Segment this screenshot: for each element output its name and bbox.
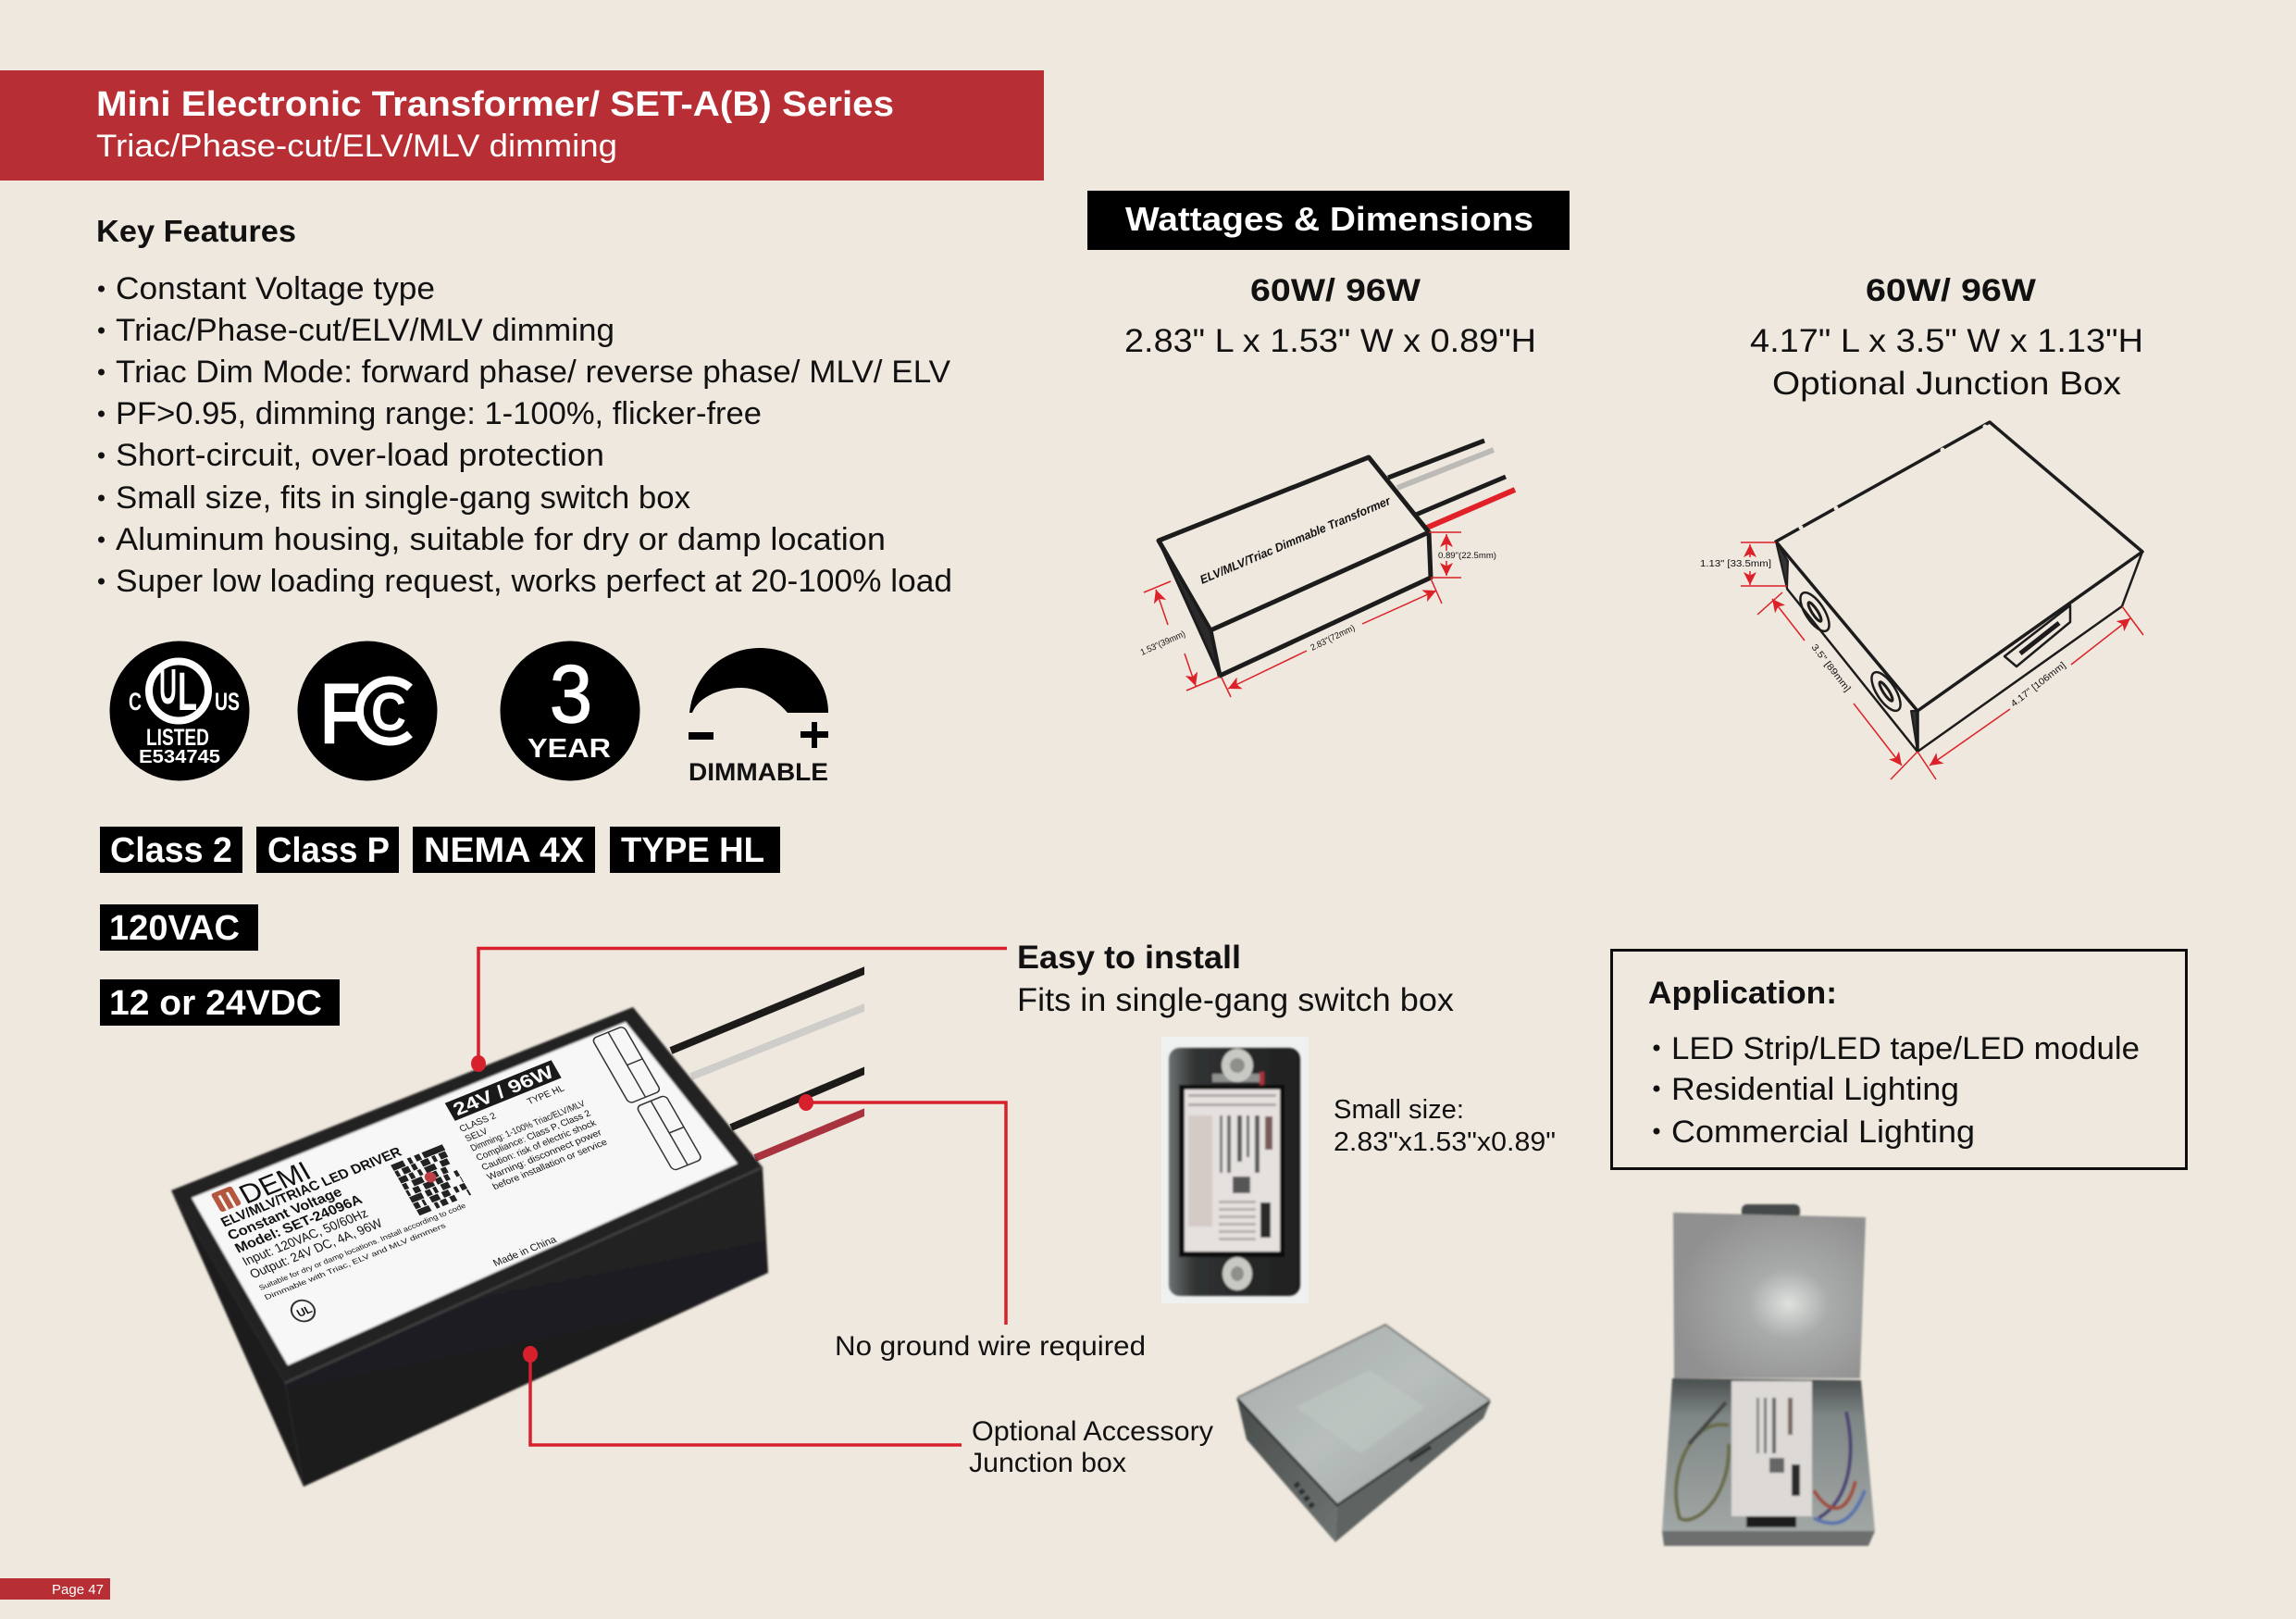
key features list: Constant Voltage type: [116, 271, 435, 306]
specification text: CLASS 2: [458, 1111, 499, 1135]
spec: small unit: [1124, 273, 1536, 359]
application list: Commercial Lighting: [1671, 1115, 1975, 1150]
key features list: Short-circuit, over-load protection: [116, 438, 604, 473]
callout: easy to install leader: [471, 948, 1007, 1072]
product photo: transformer: [171, 965, 879, 1487]
photo: switch box fit: [1161, 1037, 1309, 1303]
page number tab: Page 47: [52, 1582, 104, 1598]
tag: TYPE HL: TYPE HL: [621, 831, 764, 870]
product label: Dimmable with Triac, ELV and MLV dimmers: [263, 1222, 447, 1301]
application list: [1653, 1031, 2140, 1150]
icon: UL listed: E534745: [139, 747, 220, 767]
dimension labels: 1.13" [33.5mm]: [1700, 559, 1771, 569]
box outline: [1776, 422, 2142, 752]
diagram: transformer dimensions: [1139, 441, 1515, 697]
icon: UL listed: C: [129, 688, 142, 716]
photo: open junction box: [1662, 1204, 1875, 1546]
icon: 3 year warranty: YEAR: [527, 734, 611, 764]
icon: 3 year warranty: 3: [550, 648, 592, 740]
spec: small unit: 60W/ 96W: [1250, 273, 1421, 308]
diagram: junction box dimensions: 4.17" [106mm]: [2009, 660, 2068, 709]
specification text: SELV: [464, 1127, 490, 1144]
icon: FCC: [298, 641, 437, 781]
key features list: [98, 271, 952, 599]
product label: Suitable for dry or damp locations. Install according to code: [257, 1202, 468, 1292]
title: Mini Electronic Transformer/ SET-A(B) Series: [96, 85, 894, 124]
header banner: [0, 70, 1044, 181]
dimension lines: [1741, 542, 2143, 779]
tag: 120VAC: [100, 904, 258, 951]
callout text: easy to install: Fits in single-gang switch box: [1017, 982, 1455, 1018]
tag: NEMA 4X: NEMA 4X: [424, 831, 585, 870]
icon: dimmable: [689, 648, 828, 786]
housing label: ELV/MLV/Triac Dimmable Transformer: [1198, 493, 1393, 587]
spec: junction box: 4.17" L x 3.5" W x 1.13"H: [1750, 323, 2143, 359]
key features list: Aluminum housing, suitable for dry or damp location: [116, 522, 886, 557]
lead wires: [671, 965, 879, 1158]
product label: UL: [294, 1302, 315, 1320]
icon: 3 year warranty: [500, 641, 640, 781]
key features list: Super low loading request, works perfect at 20-100% load: [116, 564, 952, 599]
product label: Model: SET-24096A: [232, 1192, 366, 1256]
spec: small unit: 2.83" L x 1.53" W x 0.89"H: [1124, 323, 1536, 359]
spec: junction box: Optional Junction Box: [1772, 366, 2122, 402]
icon: UL listed: US: [215, 688, 240, 716]
callout: no ground wire leader: [799, 1094, 1006, 1325]
callout text: easy to install: [1017, 940, 1455, 1018]
icon: FCC: C: [371, 682, 406, 742]
icon: UL listed: LISTED: [146, 725, 209, 751]
QR code: [392, 1147, 469, 1213]
spec text: small size: 2.83"x1.53"x0.89": [1334, 1127, 1556, 1157]
key features list: Small size, fits in single-gang switch box: [116, 480, 690, 516]
tag: 120VAC: 120VAC: [109, 909, 240, 948]
callout text: no ground wire: No ground wire required: [835, 1331, 1146, 1362]
made in china: Made in China: [491, 1234, 559, 1269]
dimension lines: [1144, 532, 1461, 697]
spec text: small size: [1334, 1095, 1556, 1157]
diagram: junction box dimensions: 3.5" [89mm]: [1809, 642, 1853, 694]
subtitle: Triac/Phase-cut/ELV/MLV dimming: [96, 129, 617, 164]
callout text: optional accessory: Junction box: [969, 1448, 1126, 1478]
tag: 12 or 24VDC: 12 or 24VDC: [109, 984, 322, 1023]
diagram: transformer dimensions: 1.53"(39mm): [1139, 629, 1187, 658]
spec text: small size: Small size:: [1334, 1095, 1464, 1125]
application list: LED Strip/LED tape/LED module: [1671, 1031, 2140, 1066]
icon: UL listed: U: [159, 659, 177, 715]
product label: DEMI: [234, 1156, 316, 1210]
housing: [171, 1007, 768, 1487]
heading: key features: Key Features: [96, 214, 296, 248]
UL mark: [287, 1297, 319, 1325]
callout: junction box leader: [523, 1346, 962, 1445]
specification text: Compliance: Class P, Class 2: [475, 1109, 593, 1164]
page number tab: [0, 1578, 110, 1600]
housing outline: [1159, 457, 1431, 676]
key features list: Triac Dim Mode: forward phase/ reverse phase/ MLV/ ELV: [116, 355, 950, 390]
dimension labels: 0.89"(22.5mm): [1438, 551, 1496, 561]
heading: wattages and dimensions: [1087, 191, 1570, 250]
application heading: Application:: [1648, 976, 1837, 1011]
callout text: optional accessory: Optional Accessory: [972, 1416, 1213, 1447]
heading: wattages and dimensions: Wattages & Dimensions: [1125, 200, 1533, 238]
key features list: PF>0.95, dimming range: 1-100%, flicker-free: [116, 396, 762, 431]
wattage badge: [445, 1060, 562, 1121]
specification text: Warning: disconnect power: [486, 1127, 604, 1183]
callout text: easy to install: Easy to install: [1017, 940, 1241, 976]
product label: Constant Voltage: [225, 1184, 345, 1243]
key features list: Triac/Phase-cut/ELV/MLV dimming: [116, 313, 614, 348]
spec: junction box: 60W/ 96W: [1866, 273, 2037, 308]
diagram: junction box dimensions: [1700, 422, 2143, 779]
photo: junction box: [1237, 1325, 1490, 1542]
specification text: [458, 1079, 610, 1192]
product label: Output: 24V DC, 4A, 96W: [247, 1215, 385, 1281]
spec: junction box: [1750, 273, 2143, 402]
wiring panels: [592, 1026, 702, 1173]
product label: 24V / 96W: [450, 1063, 558, 1120]
logo: [211, 1186, 242, 1213]
specification text: Dimming: 1-100% Triac/ELV/MLV: [469, 1099, 588, 1153]
label text: ELV/MLV/TRIAC LED DRIVER: [218, 1144, 404, 1230]
callout text: optional accessory: [969, 1416, 1213, 1478]
tag: Class 2: Class 2: [110, 831, 232, 870]
specification text: TYPE HL: [526, 1084, 566, 1107]
application list: Residential Lighting: [1671, 1072, 1959, 1107]
diagram: transformer dimensions: 2.83"(72mm): [1309, 623, 1357, 654]
icon: FCC: F: [320, 665, 361, 762]
specification text: before installation or service: [491, 1138, 610, 1192]
icon: UL listed: [109, 641, 250, 781]
product label: Input: 120VAC, 50/60Hz: [240, 1205, 370, 1268]
icon: UL listed: L: [178, 662, 197, 722]
product label: [205, 1026, 714, 1351]
panel: application: [1612, 950, 2186, 1168]
wires: [1388, 441, 1515, 528]
tag: Class P: Class P: [267, 831, 390, 870]
icon: dimmable: DIMMABLE: [689, 758, 828, 786]
specification text: Caution: risk of electric shock: [480, 1118, 598, 1173]
